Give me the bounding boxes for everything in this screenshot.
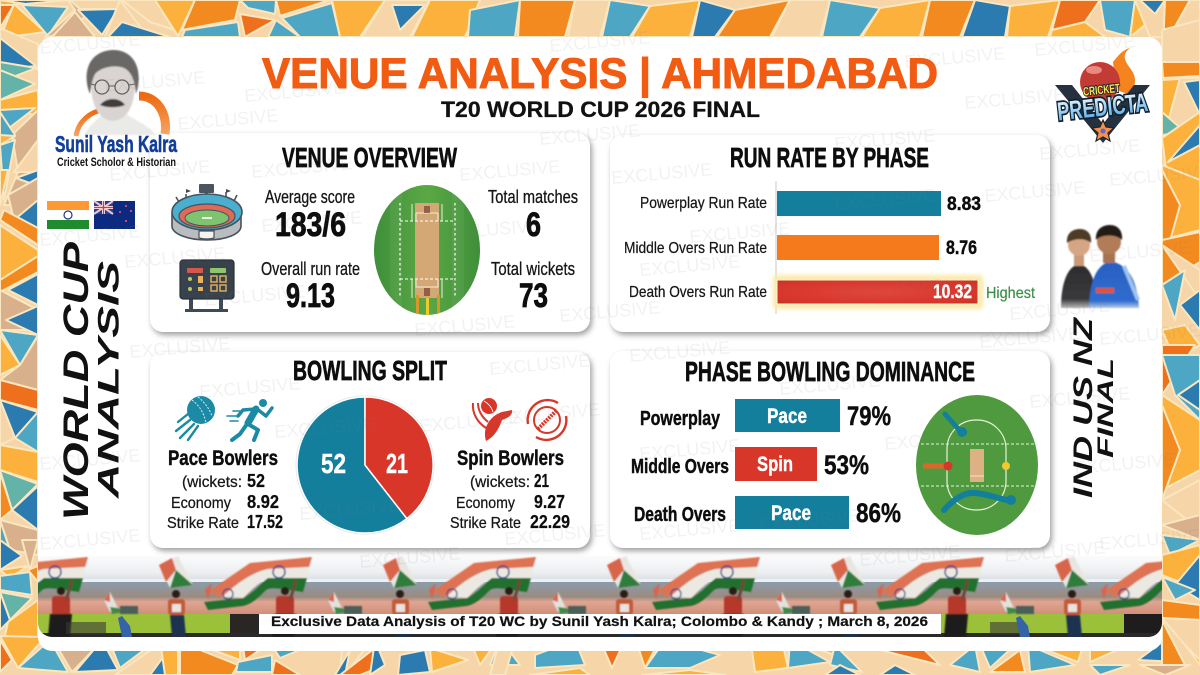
bar: powerplay run rate: 8.83 (947, 194, 981, 215)
stat: total wickets: 73 (519, 277, 548, 315)
row: death overs pace 86% (634, 496, 901, 529)
watermarks: EXCLUSIVE (1009, 295, 1111, 324)
watermarks: EXCLUSIVE (979, 323, 1081, 352)
watermarks: EXCLUSIVE (109, 156, 211, 185)
vertical label: world cup analysis: WORLD CUP (57, 241, 96, 520)
pace bowlers stats: 17.52 (247, 512, 283, 532)
stat: overall run rate (261, 259, 360, 315)
logo: Cricket Predicta: PREDICTA (1056, 87, 1150, 126)
stat: total matches: 6 (526, 206, 541, 244)
bar: middle overs run rate (624, 235, 977, 260)
pace bowlers stats: Strike Rate (167, 515, 239, 532)
row: middle overs spin 53%: 53% (824, 450, 869, 480)
watermarks: EXCLUSIVE (499, 399, 601, 428)
heading: phase bowling dominance: PHASE BOWLING DOMINANCE (685, 356, 975, 387)
watermarks: EXCLUSIVE (459, 156, 561, 185)
row: middle overs spin 53%: Middle Overs (631, 456, 729, 478)
watermarks: EXCLUSIVE (559, 297, 661, 326)
logo: Cricket Predicta: CRICKET (1082, 81, 1121, 99)
bar: powerplay run rate (640, 191, 981, 216)
spin bowlers stats: Spin Bowlers (457, 447, 564, 470)
watermarks: EXCLUSIVE (839, 275, 941, 304)
vertical label: IND vs NZ final (1068, 316, 1118, 498)
illustration: field bowling zones (916, 395, 1038, 535)
spin bowlers stats: 22.29 (530, 512, 570, 532)
watermarks: EXCLUSIVE (1039, 135, 1141, 164)
pie chart: wickets split (296, 396, 434, 534)
title: VENUE ANALYSIS | AHMEDABAD (262, 50, 938, 98)
watermarks: EXCLUSIVE (39, 221, 141, 250)
panel: venue overview (150, 133, 590, 332)
axis line (775, 181, 777, 314)
vertical label: IND vs NZ final: FINAL (1093, 358, 1118, 458)
pie chart: wickets split: 52 (321, 448, 346, 479)
watermarks: EXCLUSIVE (104, 67, 206, 96)
bar: middle overs run rate: 8.76 (946, 238, 977, 259)
watermarks: EXCLUSIVE (629, 337, 731, 366)
watermarks: EXCLUSIVE (274, 413, 376, 442)
panel: bowling split (150, 352, 590, 548)
watermarks: EXCLUSIVE (689, 218, 791, 247)
row: death overs pace 86%: Pace (771, 502, 811, 525)
pace bowlers stats: Pace Bowlers (168, 447, 278, 470)
spin bowlers stats: 21 (534, 471, 549, 491)
watermarks: EXCLUSIVE (359, 543, 461, 572)
stat: total wickets: Total wickets (491, 259, 575, 279)
banner: stadium crowd with Indian flags (38, 556, 1162, 637)
bar: middle overs run rate: Middle Overs Run Rate (624, 240, 767, 257)
stat: total matches: Total matches (488, 187, 578, 207)
row: powerplay pace 79%: Pace (767, 405, 807, 428)
stat: overall run rate: 9.13 (286, 277, 335, 315)
watermarks: EXCLUSIVE (884, 425, 986, 454)
pace bowlers stats: 8.92 (247, 492, 279, 512)
panel: phase bowling dominance (610, 351, 1050, 548)
watermarks: EXCLUSIVE (39, 445, 141, 474)
row: powerplay pace 79%: 79% (847, 401, 891, 431)
watermarks: EXCLUSIVE (639, 435, 741, 464)
watermarks: EXCLUSIVE (251, 153, 353, 182)
spin bowlers stats: 9.27 (534, 492, 565, 512)
icon: spin ball in circular arrows (528, 400, 566, 440)
vertical label: world cup analysis (57, 241, 126, 520)
logo: Cricket Predicta (1055, 48, 1150, 143)
icon: fast ball (176, 396, 215, 440)
flag: New Zealand (94, 201, 135, 229)
spin bowlers stats: (wickets: (470, 474, 530, 491)
stat: total matches (488, 187, 578, 244)
bar: death overs run rate (highest): 10.32 (933, 282, 972, 303)
watermarks: EXCLUSIVE (1099, 525, 1200, 554)
watermarks: EXCLUSIVE (1089, 237, 1191, 266)
watermarks: EXCLUSIVE (124, 243, 226, 272)
watermarks: EXCLUSIVE (539, 120, 641, 149)
heading: bowling split: BOWLING SPLIT (293, 355, 447, 386)
row: powerplay pace 79% (640, 399, 891, 432)
watermarks: EXCLUSIVE (639, 515, 741, 544)
footer caption (259, 614, 941, 634)
spin bowlers stats (450, 447, 570, 532)
watermarks: EXCLUSIVE (549, 27, 651, 56)
row: middle overs spin 53% (631, 447, 869, 481)
stat: average score (265, 187, 355, 244)
watermarks: EXCLUSIVE (639, 251, 741, 280)
watermarks: EXCLUSIVE (834, 125, 936, 154)
watermarks: EXCLUSIVE (39, 29, 141, 58)
illustration: cricket field with pitch (374, 185, 480, 315)
vertical label: IND vs NZ final: IND US NZ (1068, 316, 1098, 498)
watermarks: EXCLUSIVE (504, 520, 606, 549)
name: Sunil Yash Kalra: Sunil Yash Kalra (55, 131, 177, 157)
watermarks: EXCLUSIVE (779, 370, 881, 399)
pace bowlers stats: Economy (171, 495, 231, 512)
vertical label: world cup analysis: ANALYSIS (92, 261, 126, 500)
panel: run rate by phase (610, 135, 1050, 332)
icon: running bowler (227, 399, 272, 440)
watermarks: EXCLUSIVE (204, 281, 306, 310)
row: death overs pace 86%: Death Overs (634, 504, 726, 526)
pace bowlers stats (167, 447, 283, 532)
subtitle: T20 WORLD CUP 2026 FINAL (441, 97, 760, 122)
bar: death overs run rate (highest): Death Overs Run Rate (629, 284, 767, 301)
photo: players of New Zealand and India (1061, 225, 1139, 308)
watermarks: EXCLUSIVE (299, 495, 401, 524)
watermarks: EXCLUSIVE (1074, 449, 1176, 478)
stat: average score: Average score (265, 187, 355, 207)
row: death overs pace 86%: 86% (856, 498, 901, 528)
watermarks: EXCLUSIVE (904, 43, 1006, 72)
watermarks: EXCLUSIVE (177, 105, 279, 134)
bar: death overs run rate (highest) (629, 275, 1036, 309)
watermarks: EXCLUSIVE (964, 84, 1066, 113)
bar: powerplay run rate: Powerplay Run Rate (640, 195, 767, 212)
bar: death overs run rate (highest): Highest (986, 285, 1036, 302)
watermarks: EXCLUSIVE (759, 505, 861, 534)
watermarks: EXCLUSIVE (489, 350, 591, 379)
watermarks: EXCLUSIVE (129, 333, 231, 362)
pace bowlers stats: 52 (247, 471, 265, 491)
pie chart: wickets split: 21 (386, 448, 408, 479)
watermarks: EXCLUSIVE (1004, 537, 1106, 566)
stat: overall run rate: Overall run rate (261, 259, 360, 279)
watermarks: EXCLUSIVE (834, 185, 936, 214)
row: middle overs spin 53%: Spin (757, 453, 793, 476)
icon: spinning ball and hand (473, 398, 512, 441)
watermarks: EXCLUSIVE (1029, 383, 1131, 412)
watermarks: EXCLUSIVE (39, 525, 141, 554)
spin bowlers stats: Strike Rate (450, 515, 521, 532)
watermarks: EXCLUSIVE (244, 77, 346, 106)
row: powerplay pace 79%: Powerplay (640, 408, 721, 430)
watermarks: EXCLUSIVE (859, 541, 961, 570)
watermarks: EXCLUSIVE (261, 207, 363, 236)
icon: stadium (172, 184, 242, 240)
footer caption: Exclusive Data Analysis of T20 WC by Sunil Yash Kalra; Colombo & Kandy ; March 8, 2026 (271, 614, 929, 629)
flag: India (47, 201, 89, 229)
stat: average score: 183/6 (275, 206, 346, 244)
spin bowlers stats: Economy (456, 495, 515, 512)
watermarks: EXCLUSIVE (439, 215, 541, 244)
watermarks: EXCLUSIVE (199, 373, 301, 402)
watermarks: EXCLUSIVE (984, 177, 1086, 206)
subtitle: cricket scholor and historian: Cricket Scholor & Historian (57, 157, 176, 169)
portrait: Sunil Yash Kalra (76, 50, 165, 136)
watermarks (39, 27, 1200, 572)
watermarks: EXCLUSIVE (611, 159, 713, 188)
icon: scoreboard (180, 260, 234, 312)
watermarks: EXCLUSIVE (414, 311, 516, 340)
heading: run rate by phase: RUN RATE BY PHASE (730, 142, 929, 173)
heading: venue overview: VENUE OVERVIEW (282, 142, 457, 173)
pace bowlers stats: (wickets: (182, 474, 242, 491)
stat: total wickets (491, 259, 575, 315)
watermarks: EXCLUSIVE (1034, 31, 1136, 60)
watermarks: EXCLUSIVE (419, 407, 521, 436)
watermarks: EXCLUSIVE (1099, 320, 1200, 349)
